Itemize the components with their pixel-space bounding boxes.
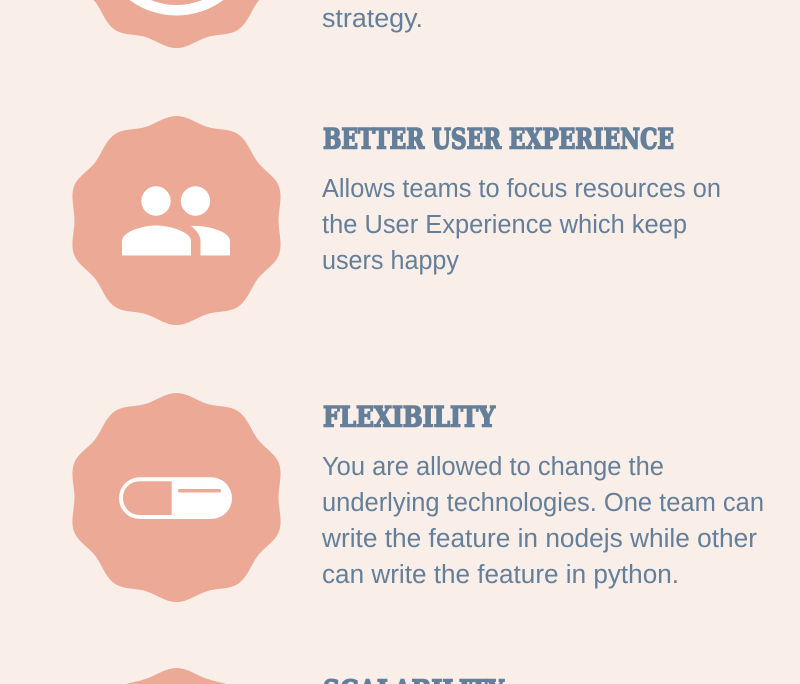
text: flexibility description: underlying technologies. One team can <box>322 489 764 517</box>
icon: capsule <box>119 477 232 519</box>
text: better user experience description: Allows teams to focus resources on <box>322 175 721 203</box>
badge: scalability <box>126 668 226 684</box>
text: better user experience description: users happy <box>322 247 459 275</box>
text: better user experience description: the User Experience which keep <box>322 211 687 239</box>
text: flexibility description: You are allowed to change the <box>322 453 664 481</box>
panel: scalability (cropped) <box>126 668 505 684</box>
text: flexibility description: can write the feature in python. <box>322 561 679 589</box>
badge: better user experience <box>72 116 281 325</box>
icon: ring <box>130 0 224 16</box>
panel: flexibility <box>72 393 764 602</box>
panel: better user experience <box>72 116 721 325</box>
badge: flexibility <box>72 393 281 602</box>
text: flexibility description: write the feature in nodejs while other <box>321 525 758 553</box>
panel: strategy (cropped) <box>94 0 423 48</box>
heading: better user experience: BETTER USER EXPERIENCE <box>323 122 674 156</box>
text: flexibility description <box>321 453 764 589</box>
text: strategy: strategy. <box>322 5 423 33</box>
icon: two users <box>122 186 230 256</box>
text: better user experience description <box>322 175 721 275</box>
badge: strategy <box>94 0 260 48</box>
heading: flexibility: FLEXIBILITY <box>323 400 496 434</box>
